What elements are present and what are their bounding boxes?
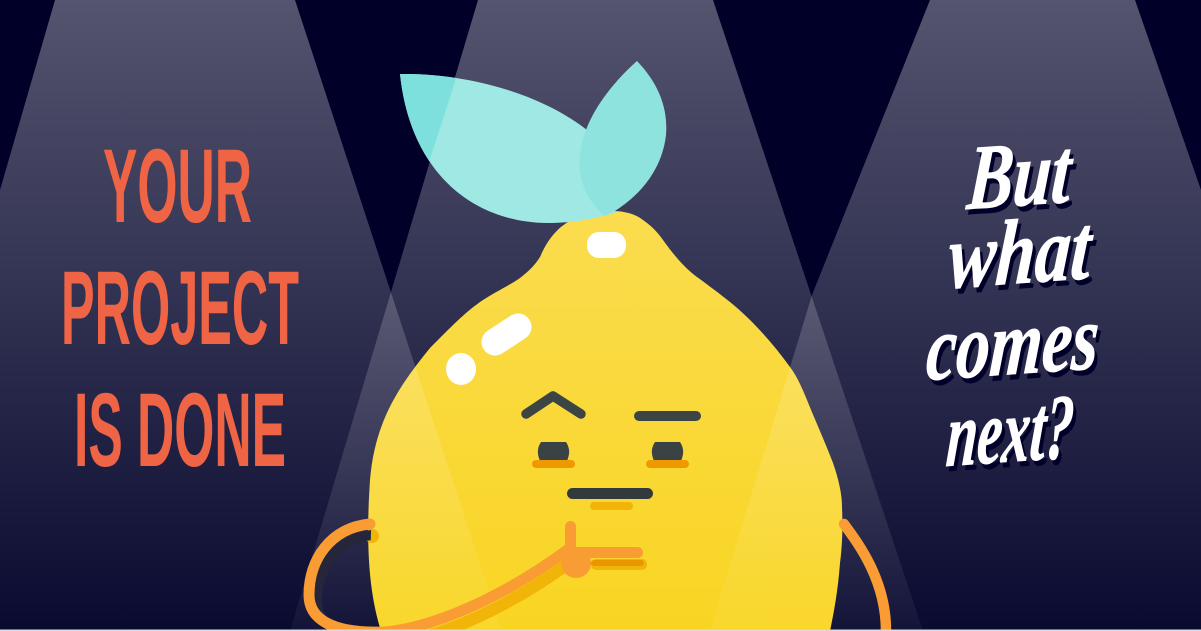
palm [561, 548, 591, 578]
right arm [844, 524, 886, 631]
left arm shadow dot [365, 529, 379, 543]
finger shadow [591, 559, 647, 570]
script text: but what comes next: comes [924, 286, 1102, 400]
bottom edge [0, 630, 1201, 631]
heading: your project is done: YOUR [103, 128, 252, 245]
pointing finger [570, 547, 643, 558]
script text shadow: but what comes next: comes [927, 291, 1105, 405]
spotlight: left [0, 0, 502, 631]
left arm cast shadow [317, 535, 372, 631]
highlight: top [587, 232, 626, 258]
hand [561, 521, 647, 578]
left eyelid shadow [532, 460, 575, 468]
script text: but what comes next: But [964, 119, 1076, 229]
left eye [538, 442, 569, 461]
left leaf [400, 74, 615, 223]
highlight: long shine [495, 327, 518, 342]
left arm [309, 524, 570, 631]
heading: your project is done: IS DONE [74, 372, 286, 489]
highlight: small shine [446, 353, 476, 385]
mouth [567, 488, 653, 499]
script text: but what comes next: what [946, 196, 1096, 308]
left arm shadow on body [388, 560, 573, 631]
mouth shadow [590, 502, 633, 510]
heading: your project is done [61, 128, 299, 489]
spotlight: right [710, 0, 1201, 631]
right eyebrow [634, 411, 701, 421]
script text shadow: but what comes next: next? [947, 380, 1080, 491]
right eyelid shadow [646, 460, 689, 468]
script text: but what comes next [924, 119, 1102, 486]
script text: but what comes next: next? [944, 375, 1077, 486]
script text shadow: but what comes next: But [967, 124, 1079, 234]
raised finger [565, 521, 576, 561]
face [526, 396, 701, 510]
right leaf [579, 61, 666, 216]
left eyebrow [526, 396, 581, 414]
script text shadow: but what comes next: what [949, 201, 1099, 313]
spotlight: centre [290, 0, 923, 631]
right eye [652, 442, 683, 461]
infographic scene: PROJECT [61, 250, 299, 367]
finger shadow inner [591, 560, 644, 566]
lemon body [368, 211, 842, 631]
script text shadow: but what comes next [927, 124, 1105, 491]
